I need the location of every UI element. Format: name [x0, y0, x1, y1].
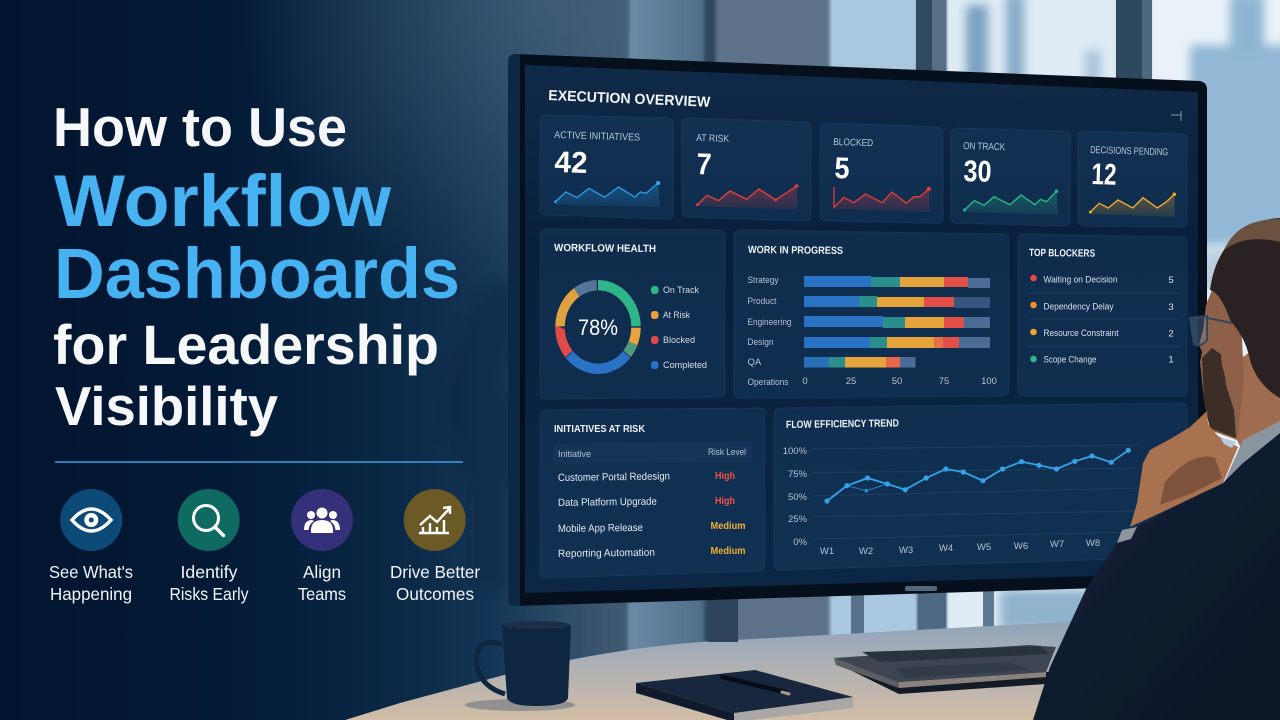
- light gap between hand and neck: [1220, 437, 1236, 448]
- benefit: see what's happening: [49, 489, 133, 604]
- blocker list: Dependency Delay: [1044, 302, 1114, 312]
- KPI card: on track: ON TRACK: [963, 141, 1006, 153]
- ear: [1221, 325, 1239, 379]
- KPI card: active initiatives: [540, 115, 673, 219]
- y axis labels: [783, 446, 808, 548]
- table rows: High: [715, 470, 735, 482]
- KPI card: at risk: AT RISK: [696, 133, 730, 145]
- panel: initiatives at risk: [540, 408, 765, 578]
- row labels: Operations: [748, 377, 789, 388]
- notebook and pen: [636, 670, 853, 720]
- donut legend: Completed: [663, 360, 707, 371]
- bar axis labels: 100: [981, 376, 997, 387]
- KPI card: blocked: BLOCKED: [833, 137, 873, 149]
- icon: magnifying glass: [194, 506, 224, 536]
- shirt cuff: [1117, 527, 1137, 543]
- donut legend: On Track: [663, 285, 699, 296]
- blocker list: Waiting on Decision: [1044, 274, 1118, 286]
- x axis labels: W1: [820, 546, 834, 557]
- row labels: Strategy: [748, 275, 779, 286]
- panel: initiatives at risk: Initiative: [558, 449, 591, 460]
- blocker list: Scope Change: [1044, 354, 1096, 366]
- row labels: [748, 275, 792, 388]
- table header: [554, 442, 752, 464]
- panel: flow efficiency trend: [774, 403, 1187, 570]
- table rows: Mobile App Release: [558, 522, 643, 535]
- camera/logo strip: [905, 586, 937, 591]
- benefit: see what's happening: See What's: [49, 562, 133, 582]
- panel: workflow health: [540, 229, 725, 399]
- monitor screen: [525, 65, 1198, 593]
- divider: [55, 461, 463, 463]
- donut legend: [651, 285, 707, 371]
- x axis labels: W5: [977, 542, 991, 553]
- y axis labels: 25%: [788, 514, 808, 525]
- table rows: Reporting Automation: [558, 547, 655, 560]
- x axis labels: W3: [899, 545, 913, 556]
- title: for Leadership: [53, 313, 439, 376]
- title: [53, 96, 460, 437]
- benefit: align teams: [291, 489, 353, 604]
- bar axis labels: 50: [892, 376, 902, 387]
- benefit: see what's happening: Happening: [50, 584, 132, 604]
- row labels: Engineering: [748, 317, 792, 328]
- KPI card: decisions pending: DECISIONS PENDING: [1090, 145, 1168, 158]
- row labels: QA: [748, 357, 762, 368]
- donut legend: At Risk: [663, 310, 690, 321]
- blocker list: 2: [1168, 328, 1174, 340]
- table rows: Medium: [710, 545, 746, 557]
- table rows: Customer Portal Redesign: [558, 470, 670, 484]
- blurred plant silhouette: [423, 270, 537, 590]
- panel: work in progress: [734, 230, 1009, 398]
- y axis labels: 0%: [793, 537, 808, 548]
- blocker list: Resource Constraint: [1044, 328, 1119, 339]
- table rows: High: [715, 495, 735, 507]
- x axis labels: W4: [939, 543, 953, 554]
- blocker list: 5: [1168, 275, 1174, 286]
- dashboard title: EXECUTION OVERVIEW: [548, 88, 711, 111]
- KPI card: blocked: 5: [834, 152, 850, 185]
- face: [1199, 290, 1244, 440]
- monitor stand: [708, 596, 738, 642]
- benefit: identify risks early: Risks Early: [170, 584, 249, 604]
- y axis labels: 100%: [783, 446, 808, 457]
- title: Visibility: [55, 375, 278, 437]
- table rows: Medium: [710, 520, 746, 532]
- panel: flow efficiency trend: FLOW EFFICIENCY TREND: [786, 417, 899, 431]
- title: Dashboards: [54, 235, 460, 314]
- table rows: [558, 470, 746, 560]
- dashboard: [540, 88, 1187, 578]
- monitor: [508, 54, 1207, 606]
- panel: initiatives at risk: Risk Level: [708, 447, 746, 458]
- bar axis labels: 0: [802, 376, 808, 387]
- benefit: drive better outcomes: Outcomes: [396, 584, 474, 604]
- wall glow: [230, 0, 630, 310]
- benefit: align teams: Align: [303, 562, 341, 582]
- KPI card: at risk: 7: [696, 148, 712, 181]
- jacket: [1033, 433, 1280, 720]
- benefit: align teams: Teams: [298, 584, 346, 604]
- title: Workflow: [54, 161, 391, 242]
- benefit: drive better outcomes: [390, 489, 480, 604]
- KPI card: at risk: [682, 118, 811, 221]
- mug: [465, 621, 575, 711]
- neck: [1225, 330, 1280, 452]
- table rows: Data Platform Upgrade: [558, 496, 657, 509]
- y axis labels: 75%: [788, 469, 808, 480]
- panel: initiatives at risk: INITIATIVES AT RISK: [554, 423, 645, 435]
- corner arrow icon: [1171, 111, 1181, 121]
- bar axis labels: [802, 376, 997, 387]
- KPI card: decisions pending: [1078, 131, 1187, 227]
- shirt collar: [1223, 421, 1280, 485]
- y axis labels: 50%: [788, 492, 808, 503]
- bar axis labels: 25: [846, 376, 856, 387]
- benefit: drive better outcomes: Drive Better: [390, 562, 480, 582]
- x axis labels: W6: [1014, 541, 1028, 552]
- monitor bezel: [508, 54, 1207, 606]
- benefit: identify risks early: [170, 489, 249, 604]
- left navy panel background: [0, 0, 560, 720]
- bar axis labels: 75: [939, 376, 949, 387]
- panel: top blockers: TOP BLOCKERS: [1029, 247, 1095, 260]
- hair: [1210, 218, 1280, 398]
- blocker list: 3: [1168, 302, 1174, 313]
- panel: work in progress: WORK IN PROGRESS: [748, 244, 843, 257]
- icon: team: [304, 508, 340, 533]
- donut legend: Blocked: [663, 335, 695, 346]
- panel: top blockers: [1018, 234, 1187, 396]
- man viewing the dashboard: [1033, 218, 1280, 720]
- x axis labels: W8: [1086, 538, 1100, 549]
- beard: [1202, 348, 1236, 438]
- laptop: [834, 645, 1056, 694]
- x axis labels: W7: [1050, 539, 1064, 550]
- benefit: identify risks early: Identify: [180, 562, 238, 582]
- KPI card: active initiatives: ACTIVE INITIATIVES: [554, 130, 641, 144]
- stacked bars: [804, 276, 990, 368]
- donut chart: [560, 285, 636, 369]
- glasses: [1190, 316, 1232, 345]
- KPI card: decisions pending: 12: [1091, 158, 1117, 192]
- row labels: Product: [748, 296, 777, 307]
- icon: rising chart: [419, 507, 450, 533]
- desk: [345, 620, 1110, 720]
- panel: workflow health: WORKFLOW HEALTH: [554, 242, 656, 255]
- KPI card: active initiatives: 42: [554, 146, 588, 180]
- title: How to Use: [53, 96, 347, 158]
- blocker list: [1030, 274, 1174, 366]
- row labels: Design: [748, 337, 774, 348]
- x axis labels: [820, 538, 1100, 557]
- donut value: 78%: [578, 315, 618, 340]
- icon: eye: [72, 509, 111, 531]
- KPI card: blocked: [820, 123, 943, 223]
- KPI card: on track: [951, 128, 1070, 226]
- trend line: [824, 448, 1131, 504]
- blocker list: 1: [1168, 354, 1174, 366]
- hand: [1130, 411, 1238, 527]
- x axis labels: W2: [859, 546, 873, 557]
- KPI card: on track: 30: [963, 155, 992, 189]
